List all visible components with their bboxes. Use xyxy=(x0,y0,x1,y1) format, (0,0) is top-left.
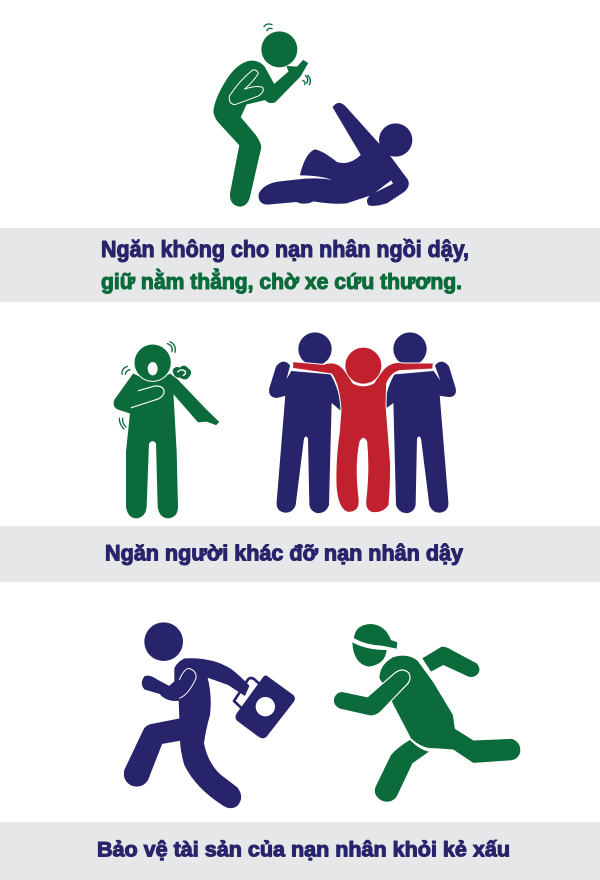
back arm xyxy=(422,647,479,677)
open mouth xyxy=(148,362,158,375)
figure: green man stopping the victim from sitting up xyxy=(214,24,310,206)
caption 1 xyxy=(101,236,469,294)
figure: green thief running away xyxy=(334,624,520,802)
figure: navy victim lying down xyxy=(259,103,412,205)
figure: green man shouting and pointing xyxy=(114,342,218,518)
victim head xyxy=(379,123,412,157)
victim body xyxy=(259,103,408,205)
shake marks xyxy=(119,342,175,429)
breath puff xyxy=(173,366,191,379)
band: caption 3 xyxy=(0,822,600,880)
running man body xyxy=(125,659,249,807)
figure: navy man running with a briefcase xyxy=(125,622,295,807)
chin highlight xyxy=(352,382,375,385)
briefcase xyxy=(235,676,295,738)
running man arm outline xyxy=(179,668,196,698)
caption 1 line 1: Ngăn không cho nạn nhân ngồi dậy, xyxy=(101,236,469,262)
face xyxy=(352,642,387,667)
caption 1 line 2: giữ nằm thẳng, chờ xe cứu thương. xyxy=(101,269,462,294)
right navy man xyxy=(385,332,455,512)
thief body xyxy=(380,656,520,762)
band: caption 2 xyxy=(0,526,600,582)
motion marks xyxy=(264,24,310,85)
figure: red person supported by two navy men xyxy=(270,332,455,513)
arm outline xyxy=(131,386,164,408)
green man body xyxy=(214,61,307,206)
briefcase white circle xyxy=(256,697,275,716)
green man arm outline xyxy=(229,70,263,105)
caption 2: Ngăn người khác đỡ nạn nhân dậy xyxy=(105,540,464,566)
caption 3: Bảo vệ tài sản của nạn nhân khỏi kẻ xấu xyxy=(97,838,510,862)
briefcase handle xyxy=(234,678,260,708)
green man head xyxy=(261,31,297,67)
running man head xyxy=(144,622,183,661)
rear leg xyxy=(375,740,429,802)
front arm xyxy=(334,671,409,715)
cap xyxy=(354,624,397,649)
red person xyxy=(293,348,433,513)
band: caption 1 xyxy=(0,228,600,302)
shouting man body xyxy=(114,374,218,518)
left navy man xyxy=(270,332,341,512)
shouting man head xyxy=(134,344,171,381)
